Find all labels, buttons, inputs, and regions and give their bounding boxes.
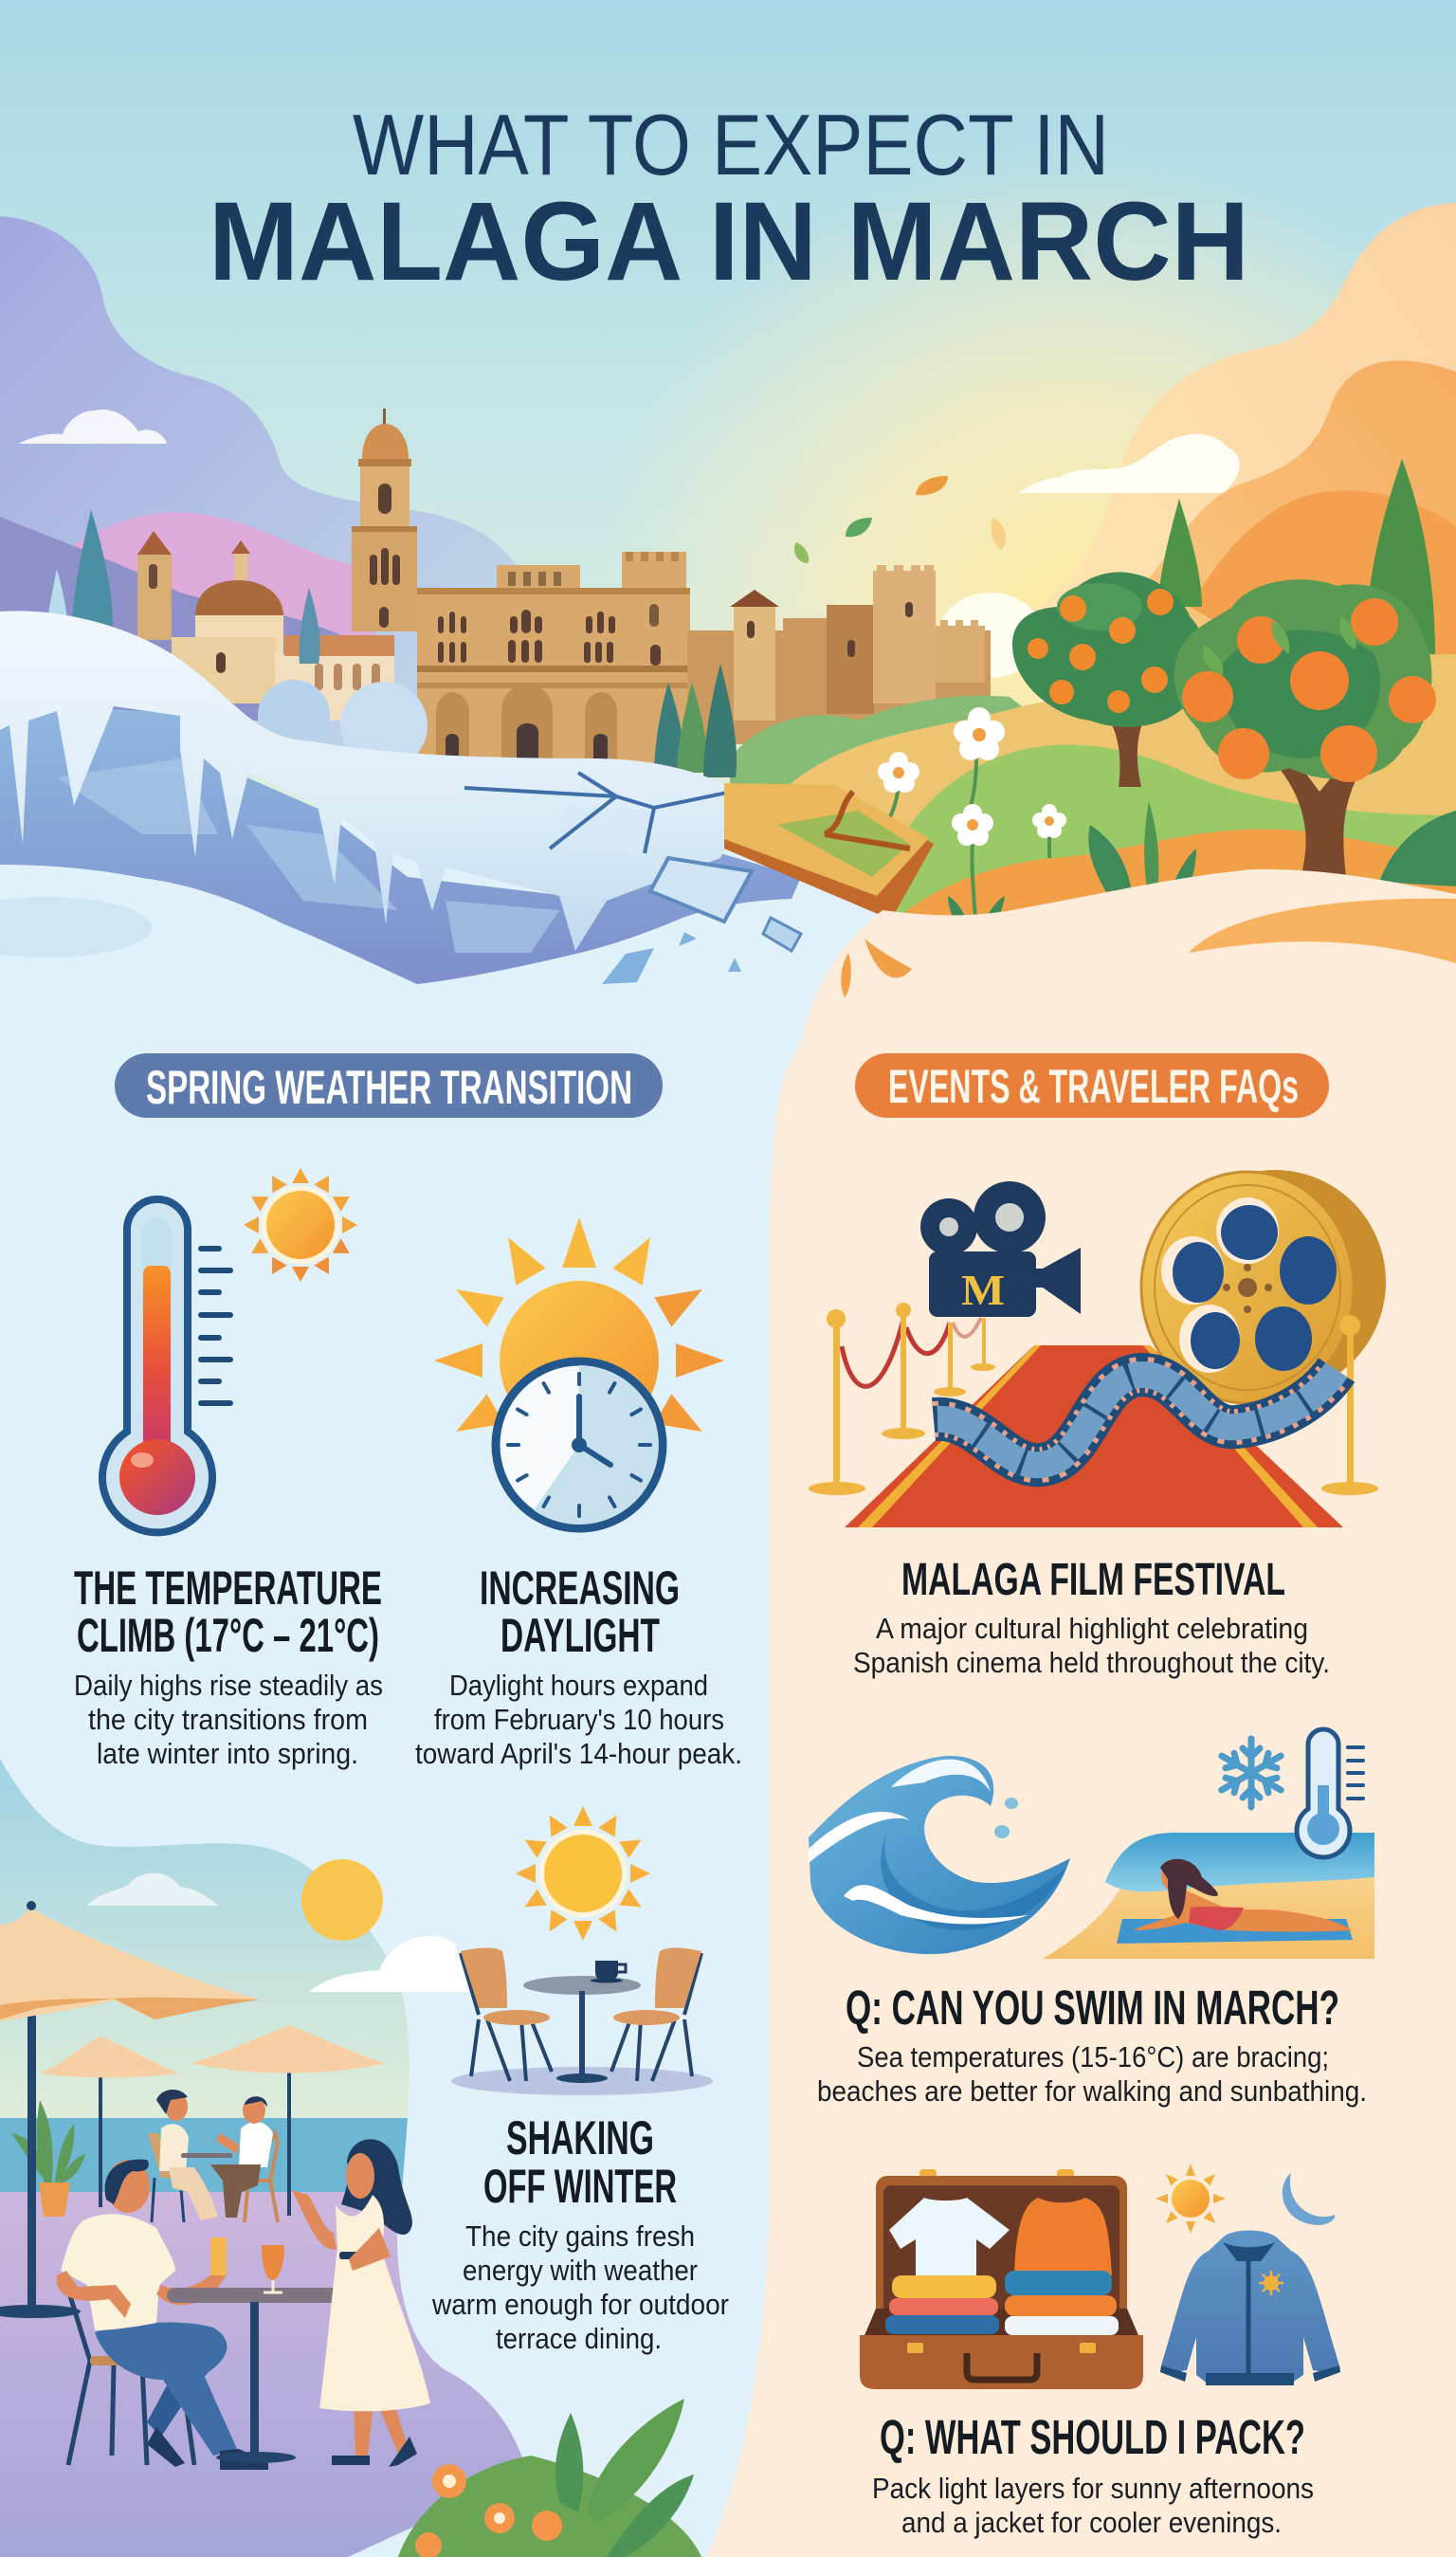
standing woman [292, 2139, 430, 2467]
umbrella back left [39, 2036, 179, 2207]
sunset glow [474, 95, 1456, 1043]
text block: temperature climb: late winter into spring. [97, 1737, 358, 1770]
film camera [920, 1181, 1081, 1317]
castle walls [687, 565, 991, 744]
icon: cafe table and chairs [451, 1948, 713, 2095]
text block: increasing daylight: from February's 10 hours [434, 1703, 724, 1736]
umbrella back right [191, 2025, 385, 2216]
red carpet [845, 1345, 1343, 1527]
snow patch [0, 897, 152, 958]
man chair [68, 2290, 194, 2465]
text block: shaking off winter [431, 2111, 729, 2355]
ice and snow hillside [0, 611, 934, 984]
text block: packing FAQ [872, 2410, 1314, 2539]
text block: temperature climb: Daily highs rise steadily as [74, 1669, 383, 1702]
text block: film festival: Spanish cinema held throughout the city. [853, 1646, 1330, 1679]
pink mountain [66, 512, 379, 683]
text block: film festival: MALAGA FILM FESTIVAL [901, 1555, 1285, 1605]
clouds [87, 1872, 218, 1906]
cathedral tower [352, 409, 417, 631]
ice cave highlights [57, 758, 559, 953]
orange field [877, 829, 1456, 948]
text block: temperature climb [74, 1562, 383, 1770]
icon: jacket [1160, 2230, 1340, 2385]
icon: snowflake [1217, 1739, 1285, 1807]
orange tree small [1012, 572, 1206, 787]
table [523, 1976, 641, 1995]
falling leaves [916, 476, 948, 495]
icon: small sun [244, 1168, 357, 1282]
sun in sky [301, 1859, 383, 1941]
text block: shaking off winter: energy with weather [463, 2254, 698, 2287]
sunbather figure [1134, 1859, 1353, 1932]
yellow meadow [787, 654, 1456, 948]
icon: sun above cafe table [516, 1806, 650, 1941]
text block: shaking off winter: warm enough for outdoor [431, 2288, 729, 2321]
foreground cypress trio [654, 664, 737, 777]
text block: swim FAQ: beaches are better for walking and sunbathing. [817, 2074, 1367, 2108]
deep orange hill [1190, 491, 1456, 758]
hero illustration: distant hills [0, 203, 1456, 853]
purple hill left [0, 216, 533, 758]
sun glow disc [938, 593, 1043, 678]
flowers [878, 707, 1066, 934]
cracked ice slabs [464, 773, 801, 984]
icon: clock [496, 1361, 663, 1528]
icon: beach with sunbather [1043, 1833, 1374, 1959]
icon: suitcase [860, 2169, 1143, 2389]
spring landscape ground [730, 654, 1456, 948]
text block: swim FAQ: Sea temperatures (15-16°C) are bracing; [857, 2040, 1329, 2073]
clothes stacks [885, 2271, 1119, 2335]
green meadow [882, 745, 1456, 948]
title line one: WHAT TO EXPECT IN [353, 98, 1109, 193]
text block: shaking off winter: OFF WINTER [483, 2160, 677, 2213]
title [209, 98, 1249, 304]
text block: shaking off winter: The city gains fresh [465, 2219, 695, 2253]
man trousers [95, 2323, 237, 2456]
text block: increasing daylight: INCREASING [480, 1562, 680, 1615]
sea band [0, 2118, 408, 2192]
lower panel: winter side [0, 815, 1456, 2557]
film reel [1141, 1170, 1386, 1403]
cloud over edge [309, 1936, 469, 1992]
man arms [57, 2271, 228, 2318]
dark mountain [0, 517, 341, 721]
terrace scene illustration [0, 1759, 701, 2557]
text block: temperature climb: the city transitions from [88, 1703, 368, 1736]
text block: film festival [853, 1555, 1330, 1679]
ice cave [0, 706, 801, 984]
icon: thermometer [102, 1199, 230, 1532]
section pill: spring weather [115, 1053, 663, 1118]
icon: big sun behind clock [434, 1217, 724, 1528]
snow drift with icicles [0, 611, 752, 951]
peach hill right [1005, 203, 1456, 853]
coffee cup [595, 1961, 618, 1980]
background man [210, 2096, 278, 2222]
background couple [148, 2090, 278, 2222]
cracked earth slab [724, 783, 934, 920]
shrubs lower right [948, 801, 1456, 938]
text block: packing FAQ: Pack light layers for sunny afternoons [872, 2472, 1314, 2505]
domed church [137, 531, 394, 721]
man shirt [61, 2214, 175, 2330]
orange sweater [1014, 2198, 1112, 2277]
frozen trees [258, 680, 428, 769]
man shoes [147, 2427, 268, 2470]
film strip [934, 1370, 1337, 1465]
large umbrella [0, 1901, 261, 2318]
icon: ocean wave [809, 1756, 1070, 1954]
text block: film festival: A major cultural highlight celebrating [876, 1612, 1308, 1645]
back green hill [730, 696, 1090, 815]
tall cypress right [1365, 459, 1435, 654]
cloud left [19, 410, 167, 444]
title line two: MALAGA IN MARCH [209, 179, 1249, 304]
film camera: M [961, 1266, 1005, 1314]
man head [106, 2160, 150, 2213]
right chair [611, 1948, 701, 2081]
text block: increasing daylight [415, 1562, 742, 1770]
stanchions and ropes [809, 1303, 1378, 1495]
text block: increasing daylight: DAYLIGHT [500, 1609, 660, 1662]
text block: shaking off winter: SHAKING [506, 2111, 654, 2164]
bottom shrubs and flowers [398, 2399, 701, 2557]
section pill: spring weather: SPRING WEATHER TRANSITION [146, 1061, 632, 1114]
t-shirt [889, 2198, 1010, 2277]
cypress trees [72, 510, 113, 635]
cathedral and city skyline [47, 409, 991, 763]
panel: summer side [706, 869, 1456, 2557]
cypress right [1158, 499, 1202, 607]
sky blob [0, 1759, 410, 2190]
orange tree large [1174, 579, 1436, 877]
potted plant [11, 2100, 85, 2217]
icon: small sun and moon [1156, 2164, 1335, 2234]
orange hill right [1043, 360, 1456, 853]
text block: temperature climb: THE TEMPERATURE [74, 1562, 382, 1615]
background woman [148, 2090, 218, 2222]
text block: increasing daylight: toward April's 14-hour peak. [415, 1737, 742, 1770]
text block: shaking off winter: terrace dining. [496, 2322, 662, 2355]
section pill: events [855, 1053, 1329, 1118]
text block: packing FAQ: and a jacket for cooler evenings. [901, 2506, 1282, 2539]
seated man [57, 2160, 268, 2470]
text block: temperature climb: CLIMB (17°C – 21°C) [77, 1609, 379, 1662]
page background sky [0, 0, 1456, 1043]
paint drops [841, 939, 912, 997]
text block: swim FAQ [817, 1981, 1367, 2108]
man other leg [147, 2361, 218, 2437]
icon: cold thermometer [1297, 1729, 1363, 1857]
orange swath [1189, 899, 1456, 963]
film festival illustration [809, 1170, 1386, 1527]
left chair [461, 1948, 552, 2081]
lavender terrace ground [0, 2192, 527, 2557]
drinks [210, 2237, 227, 2275]
cafe table foreground [167, 2237, 341, 2463]
text block: increasing daylight: Daylight hours expand [449, 1669, 708, 1702]
cloud right [1019, 434, 1240, 493]
cathedral main body [417, 552, 690, 763]
